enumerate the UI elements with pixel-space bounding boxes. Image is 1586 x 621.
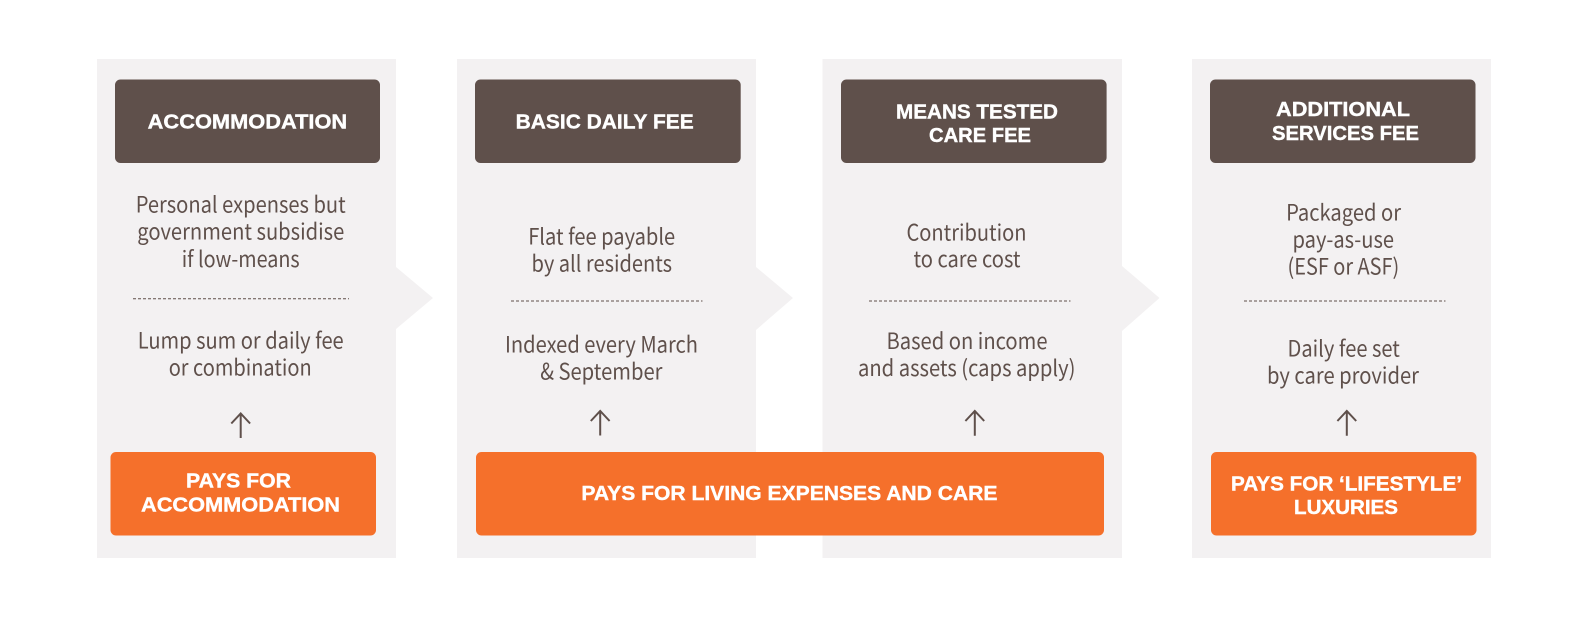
panel background with chevron (457, 59, 793, 558)
text: what it covers: government subsidise (137, 214, 344, 246)
callout: pays for living expenses and care: PAYS FOR LIVING EXPENSES AND CARE (581, 482, 997, 505)
callout: pays for lifestyle luxuries: PAYS FOR ‘LIFESTYLE’ (1231, 473, 1462, 496)
text: what it covers: Flat fee payable (528, 219, 675, 251)
text: how it is set (1267, 331, 1419, 390)
arrow: up (1337, 411, 1356, 436)
panel background (1192, 59, 1491, 558)
heading: means tested care fee: MEANS TESTED (896, 100, 1058, 123)
heading: basic daily fee: BASIC DAILY FEE (516, 110, 694, 133)
panel background with chevron (97, 59, 433, 558)
arrow: up (231, 414, 250, 438)
heading: accommodation: ACCOMMODATION (148, 110, 347, 133)
text: what it covers: Personal expenses but (136, 188, 346, 220)
text: how it is set (858, 324, 1076, 383)
text: how it is set: Daily fee set (1288, 331, 1400, 363)
panel: accommodation (97, 59, 433, 558)
text: what it covers (906, 216, 1026, 274)
text: how it is set: Based on income (886, 324, 1048, 356)
text: what it covers: (ESF or ASF) (1288, 250, 1399, 282)
text: what it covers: to care cost (914, 242, 1021, 274)
callout: pays for lifestyle luxuries: LUXURIES (1294, 496, 1398, 519)
text: what it covers (1286, 196, 1401, 282)
heading: additional services fee: ADDITIONAL (1276, 98, 1410, 121)
panel: means tested care fee (822, 59, 1160, 558)
text: how it is paid (138, 324, 344, 382)
arrow: up (591, 411, 610, 436)
callout: pays for accommodation: PAYS FOR (186, 469, 291, 492)
heading: additional services fee (1210, 80, 1476, 163)
text: what it covers: by all residents (532, 246, 672, 278)
text: what it covers (136, 188, 346, 274)
text: what it covers: pay-as-use (1292, 223, 1394, 255)
heading: means tested care fee: CARE FEE (929, 124, 1031, 147)
text: indexing: & September (540, 354, 663, 386)
text: what it covers: Contribution (906, 216, 1026, 248)
heading: basic daily fee (475, 80, 741, 163)
panel: additional services fee (1192, 59, 1491, 558)
text: how it is set: by care provider (1267, 358, 1419, 390)
text: how it is set: and assets (caps apply) (858, 351, 1076, 383)
callout: pays for accommodation (110, 452, 376, 536)
text: what it covers: if low-means (182, 242, 300, 274)
callout: pays for living expenses and care (476, 452, 1104, 536)
callout: pays for accommodation: ACCOMMODATION (141, 493, 340, 516)
heading: accommodation (115, 80, 380, 163)
text: indexing (505, 327, 698, 386)
text: how it is paid: Lump sum or daily fee (138, 324, 344, 356)
panel: basic daily fee (457, 59, 793, 558)
heading: means tested care fee (841, 80, 1107, 163)
text: what it covers: Packaged or (1286, 196, 1401, 228)
heading: additional services fee: SERVICES FEE (1272, 122, 1419, 145)
text: what it covers (528, 219, 675, 278)
text: indexing: Indexed every March (505, 327, 698, 359)
panel background with chevron (822, 59, 1160, 558)
callout: pays for lifestyle luxuries (1211, 452, 1476, 536)
text: how it is paid: or combination (169, 350, 312, 382)
arrow: up (965, 411, 984, 436)
